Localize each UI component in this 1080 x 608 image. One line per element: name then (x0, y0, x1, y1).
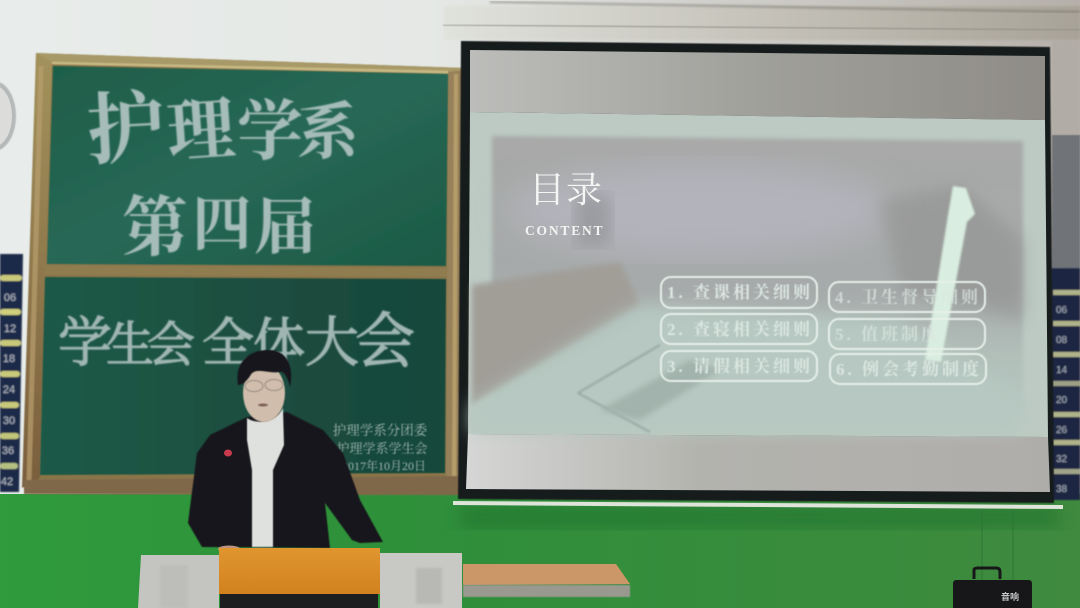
mouth (258, 404, 268, 406)
chalk title: session (122, 192, 316, 265)
chalk signature: 护理学系学生会 (336, 441, 428, 456)
blackboard divider rail (44, 265, 447, 277)
green lower wall (0, 494, 1080, 608)
left calendar strip: 24 (3, 384, 15, 396)
hand (218, 546, 240, 552)
slide top band (470, 50, 1045, 120)
menu item 3: 3. 请假相关细则 (667, 356, 813, 376)
chalk signature (333, 422, 428, 473)
menu item 2 (661, 314, 817, 344)
left calendar strip: 30 (3, 415, 15, 427)
wall clock (0, 81, 16, 151)
podium orange front (219, 548, 380, 594)
right calendar strip: 06 (1056, 305, 1068, 316)
right calendar strip: 26 (1056, 425, 1068, 436)
menu item 6 (830, 354, 986, 384)
left calendar strip (0, 254, 23, 492)
chalk title: department: 护 (85, 84, 167, 175)
right calendar strip: 08 (1056, 335, 1068, 346)
podium (138, 548, 462, 608)
right calendar strip: 14 (1056, 365, 1068, 376)
menu item 2: 2. 查寝相关细则 (667, 319, 813, 339)
left calendar strip: 18 (3, 353, 15, 365)
left calendar strip: 06 (4, 292, 16, 304)
right calendar strip: 32 (1056, 454, 1068, 465)
menu item 1: 1. 查课相关细则 (667, 283, 813, 302)
chalk title: student union plenary: 生 (106, 319, 154, 372)
chalk title: department: 学 (237, 96, 303, 169)
projector screen casing (439, 2, 1080, 135)
blackboard frame (22, 53, 465, 495)
chalk title: student union plenary: 学 (58, 313, 112, 373)
chalk title: session: 第 (122, 192, 188, 265)
chalk title: student union plenary: 会 (355, 309, 415, 375)
slide bottom band (466, 434, 1050, 492)
chalk title: department: 系 (297, 99, 360, 167)
menu item 5: 5. 值班制度 (835, 324, 941, 344)
projector screen frame (458, 41, 1054, 503)
left calendar strip: 42 (1, 476, 13, 488)
chalk title: student union plenary (58, 309, 415, 375)
right calendar strip (1051, 268, 1080, 500)
equipment case (953, 568, 1032, 608)
menu item 5 (829, 319, 985, 349)
chalk title: session: 届 (254, 194, 316, 262)
podium left panel (138, 555, 219, 608)
side table (463, 564, 630, 597)
chalk title: department (85, 84, 360, 175)
left calendar strip: 12 (4, 323, 16, 335)
right poster (1052, 135, 1080, 268)
chalk title: student union plenary: 全 (202, 316, 254, 373)
right calendar strip: 20 (1056, 395, 1068, 406)
menu item 4: 4. 卫生督导细则 (835, 287, 981, 307)
menu item 4 (829, 282, 985, 312)
chalk title: department: 理 (164, 91, 238, 171)
screen bottom bar (453, 501, 1063, 509)
podium dark base (220, 594, 378, 608)
chalk title: student union plenary: 会 (147, 319, 195, 372)
menu item 3 (661, 351, 817, 381)
glasses (245, 380, 283, 392)
chalk title: student union plenary: 大 (305, 313, 359, 373)
presenter (188, 350, 383, 552)
right calendar strip: 38 (1056, 484, 1068, 495)
projector slide (466, 50, 1050, 492)
chalk title: student union plenary: 体 (253, 316, 305, 373)
slide heading: 目录 (529, 170, 603, 210)
chalk signature: 2017年10月20日 (342, 458, 426, 473)
menu item 6: 6. 例会考勤制度 (836, 359, 982, 379)
slide subheading: CONTENT (525, 223, 604, 238)
jacket badge (224, 450, 232, 456)
chalk signature: 护理学系分团委 (333, 422, 428, 438)
face (243, 364, 285, 422)
slide image photo area (472, 136, 1023, 432)
left calendar strip: 36 (2, 445, 14, 457)
hair (237, 350, 291, 387)
menu item 1 (661, 277, 817, 308)
chalk title: session: 四 (192, 192, 252, 258)
podium right panel (380, 553, 462, 608)
slide image light border (468, 112, 1048, 437)
jacket (188, 412, 383, 548)
equipment case: 音响 (1001, 591, 1019, 602)
pen highlight (925, 186, 975, 362)
blackboard lower panel (40, 277, 446, 475)
blackboard upper panel (47, 66, 448, 266)
turtleneck (247, 408, 284, 547)
